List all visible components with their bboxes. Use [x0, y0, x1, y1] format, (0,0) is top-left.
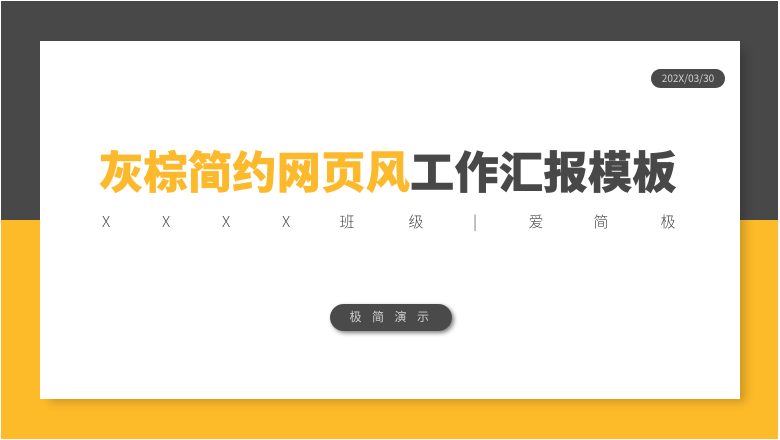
subtitle: 极: [660, 211, 676, 232]
title: 灰棕简约网页风工作汇报模板: [99, 137, 677, 201]
subtitle: 班: [339, 211, 354, 232]
subtitle: [102, 211, 676, 232]
subtitle: X: [162, 211, 170, 232]
date badge: [651, 69, 725, 88]
subtitle: X: [102, 211, 110, 232]
subtitle: |: [473, 211, 477, 232]
button: 极简演示: [330, 304, 452, 331]
button: 极简演示: 极简演示: [349, 308, 440, 325]
date badge: 202X/03/30: [662, 70, 714, 85]
background: yellow bottom band: [1, 220, 778, 439]
subtitle: 级: [408, 211, 424, 232]
subtitle: X: [222, 211, 230, 232]
subtitle: 简: [593, 211, 608, 232]
subtitle: 爱: [528, 211, 544, 232]
subtitle: X: [282, 211, 290, 232]
panel: white card: [40, 41, 740, 399]
background: dark top band: [1, 1, 778, 220]
